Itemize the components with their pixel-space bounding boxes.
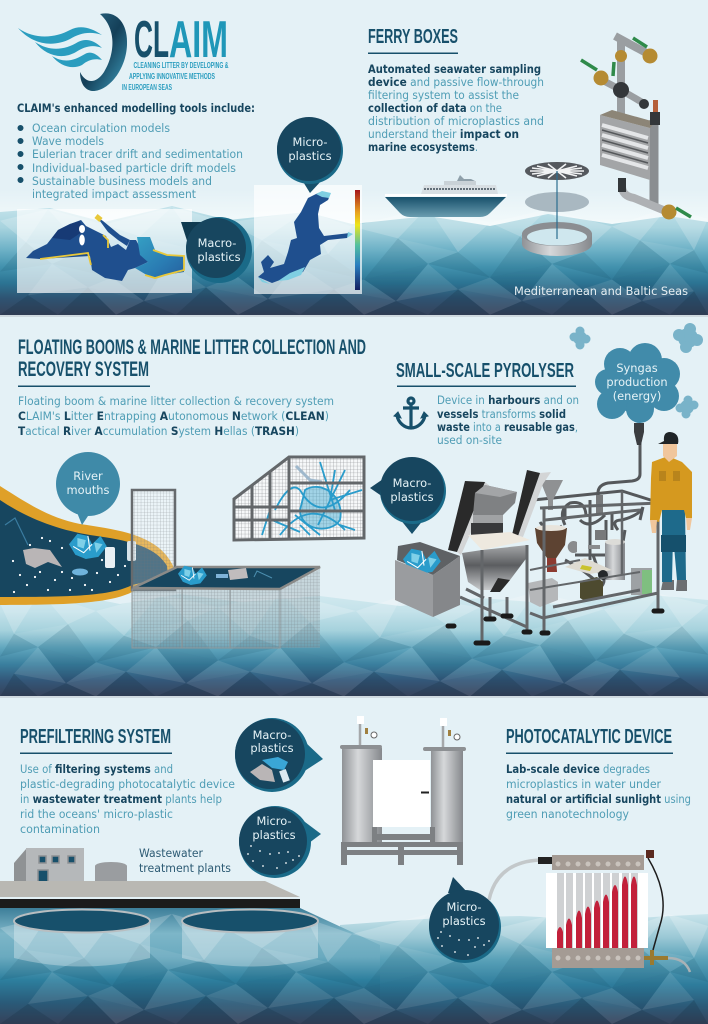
text: pyrolyser: Device in harbours and on [437, 393, 579, 407]
heading: prefiltering: PREFILTERING SYSTEM [20, 726, 171, 748]
map: eastern basin [135, 237, 184, 278]
cylinder and boxes [605, 542, 625, 580]
text: photocatalytic: microplastics in water under [506, 777, 661, 791]
callout: micro-plastics reactor: plastics [442, 914, 486, 928]
illustration: floating collector [132, 566, 320, 648]
panel: Baltic map [254, 185, 362, 294]
tangled nets [262, 462, 362, 535]
callout: macro-plastics prefilter: plastics [250, 741, 294, 755]
map: western and central basin [26, 220, 148, 281]
illustration: photoreactor [489, 850, 690, 972]
callout: river mouths: mouths [67, 483, 110, 497]
list: modelling tools: integrated impact assessment [32, 187, 196, 201]
heading: ferry boxes [368, 26, 458, 54]
list: modelling tools: Wave models [32, 134, 104, 148]
map: Baltic Sea [258, 192, 350, 283]
bottom bar [552, 948, 644, 968]
callout: micro-plastics prefilter: plastics [252, 828, 296, 842]
heading: small-scale pyrolyser: SMALL-SCALE PYROLYSER [396, 360, 574, 382]
text: pyrolyser: used on-site [437, 433, 502, 447]
list: modelling tools [20, 121, 243, 201]
text: ferry boxes: understand their impact on [368, 127, 519, 141]
illustration: worker [650, 432, 692, 591]
map: coastline litter [40, 235, 184, 278]
colour scale [355, 190, 360, 290]
gauges [360, 720, 443, 748]
reactor [540, 480, 563, 510]
callout: river mouths [56, 452, 120, 525]
hopper upper [473, 485, 517, 515]
text: prefiltering: in wastewater treatment plants help [20, 792, 222, 806]
callout: syngas cloud: production [606, 375, 668, 389]
logo tagline: CLEANING LITTER BY DEVELOPING & [134, 61, 229, 70]
callout: river mouths: River [73, 469, 103, 483]
logo tagline: APPLYING INNOVATIVE METHODS [129, 72, 215, 81]
icon: anchor [394, 398, 428, 428]
text: ferry boxes: distribution of microplastics and [368, 114, 544, 128]
text: ferry boxes: Automated seawater sampling [368, 62, 541, 76]
callout: macro-plastics map: Macro- [198, 236, 236, 250]
callout: macro-plastics pyrolyser: plastics [390, 490, 434, 504]
text: pyrolyser [437, 393, 579, 447]
text: floating booms: Tactical River Accumulation System Hellas (TRASH) [18, 424, 299, 438]
illustration: boom gate [132, 490, 175, 590]
text: floating booms: Floating boom & marine litter collection & recovery system [18, 394, 334, 408]
heading: ferry boxes: FERRY BOXES [368, 26, 458, 48]
text: ferry boxes: filtering system to assist the [368, 88, 519, 102]
illustration: settling tanks [14, 910, 318, 966]
logo wordmark: CL [134, 11, 169, 69]
feet [448, 611, 662, 643]
label: seas: Mediterranean and Baltic Seas [514, 284, 688, 298]
hose [489, 860, 540, 900]
callout: macro-plastics prefilter: Macro- [253, 728, 291, 742]
text: ferry boxes [368, 62, 544, 154]
illustration: pyrolyser machine [448, 423, 662, 643]
microplastic dots [13, 538, 125, 592]
white panel [373, 760, 430, 827]
callout: macro-plastics map: plastics [197, 250, 241, 264]
callout: macro-plastics pyrolyser [370, 457, 446, 534]
text: prefiltering: contamination [20, 822, 100, 836]
heading: floating booms: RECOVERY SYSTEM [18, 358, 149, 381]
heading: floating booms: FLOATING BOOMS & MARINE LITTER COLLECTION AND [18, 336, 366, 359]
illustration: ferry box pipework [581, 36, 691, 220]
illustration: litter bin [395, 542, 460, 617]
text: photocatalytic: green nanotechnology [506, 807, 629, 821]
base frame [341, 827, 463, 865]
icon: ferry [385, 175, 507, 217]
top bar [552, 855, 644, 870]
text: ferry boxes: marine ecosystems. [368, 140, 478, 154]
logo swooshes [18, 27, 102, 67]
text: prefiltering: Use of filtering systems and [20, 762, 173, 776]
callout: micro-plastics reactor: Micro- [447, 900, 481, 914]
callout: syngas cloud: Syngas [616, 361, 658, 375]
text: prefiltering: rid the oceans' micro-plastic [20, 807, 173, 821]
list: modelling tools: Sustainable business models and [32, 174, 212, 188]
text: prefiltering [20, 762, 235, 836]
panel: sea band middle section [0, 592, 708, 698]
callout: micro-plastics map: Micro- [293, 135, 327, 149]
text: photocatalytic [506, 762, 691, 821]
list: modelling tools: Individual-based particle drift models [32, 161, 236, 175]
logo crescent [80, 13, 127, 91]
conveyors [457, 482, 491, 555]
callout: micro-plastics reactor [429, 877, 501, 963]
red fluid [557, 876, 637, 948]
illustration: river mouth [0, 486, 174, 605]
rear frame and pipework [533, 491, 660, 588]
list: modelling tools: Ocean circulation models [32, 121, 170, 135]
heading: modelling tools: CLAIM's enhanced modelling tools include: [17, 101, 255, 115]
illustration: prefilter unit [340, 716, 466, 865]
icon: filter stack [522, 162, 592, 256]
panel: sea band bottom section [0, 908, 708, 1024]
text: ferry boxes: collection of data on the [368, 101, 502, 115]
label: wastewater treatment plants: Wastewater [139, 846, 203, 860]
logo tagline: IN EUROPEAN SEAS [122, 83, 172, 92]
callout: macro-plastics pyrolyser: Macro- [393, 476, 431, 490]
callout: syngas cloud [595, 343, 680, 423]
cable and fittings [648, 858, 663, 950]
logo wordmark: AIM [169, 11, 228, 69]
straw [5, 518, 28, 545]
callout: macro-plastics prefilter [235, 718, 323, 792]
callout: syngas cloud: (energy) [613, 389, 661, 403]
callout: micro-plastics prefilter [239, 806, 321, 878]
callout: micro-plastics prefilter: Micro- [257, 814, 291, 828]
label: wastewater treatment plants [139, 846, 231, 875]
hopper lower [462, 545, 528, 590]
text: prefiltering: plastic-degrading photocatalytic device [20, 777, 235, 791]
text: floating booms: CLAIM's Litter Entrapping Autonomous Network (CLEAN) [18, 409, 329, 423]
heading: floating booms [18, 336, 366, 387]
text: pyrolyser: vessels transforms solid [437, 407, 566, 421]
label: wastewater treatment plants: treatment plants [139, 861, 231, 875]
text: photocatalytic: natural or artificial sunlight using [506, 792, 691, 806]
logo tagline [122, 61, 229, 92]
tubes [557, 873, 638, 948]
front frame [460, 491, 660, 642]
panel: Mediterranean map [17, 209, 192, 293]
text: floating booms [18, 394, 334, 438]
logo: CLAIM [18, 11, 229, 92]
white panel [546, 873, 648, 948]
flue pipe [598, 440, 640, 510]
panel: sea band top section [0, 190, 708, 317]
illustration: treatment plant building [14, 848, 127, 892]
illustration: treatment plant platform [0, 881, 300, 908]
list: modelling tools: Eulerian tracer drift and sedimentation [32, 147, 243, 161]
cage frame [234, 457, 364, 540]
callout: micro-plastics map: plastics [288, 149, 332, 163]
vessels [342, 748, 382, 842]
text: ferry boxes: device and passive flow-through [368, 75, 544, 89]
text: photocatalytic: Lab-scale device degrades [506, 762, 650, 776]
illustration: filled mesh cage [234, 457, 364, 540]
icon: small clouds [570, 323, 703, 418]
callout: micro-plastics map [277, 117, 343, 193]
callout: macro-plastics map [181, 217, 252, 283]
litter [23, 548, 62, 568]
text: pyrolyser: waste into a reusable gas, [437, 420, 578, 434]
